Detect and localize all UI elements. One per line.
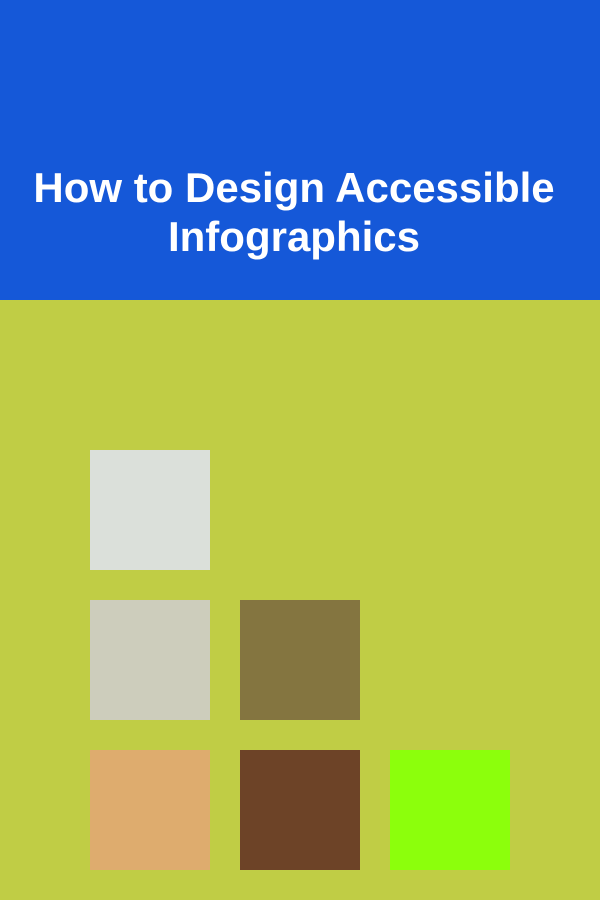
swatch: tan	[90, 750, 210, 870]
swatch: pale grey	[90, 450, 210, 570]
title: How to Design Accessible	[33, 164, 555, 211]
title	[33, 164, 555, 260]
swatch: olive brown	[240, 600, 360, 720]
swatch: lime green	[390, 750, 510, 870]
panel: swatch area	[0, 300, 600, 900]
panel: title banner	[0, 0, 600, 300]
swatch: dark brown	[240, 750, 360, 870]
swatch: light stone	[90, 600, 210, 720]
title: Infographics	[168, 213, 420, 260]
